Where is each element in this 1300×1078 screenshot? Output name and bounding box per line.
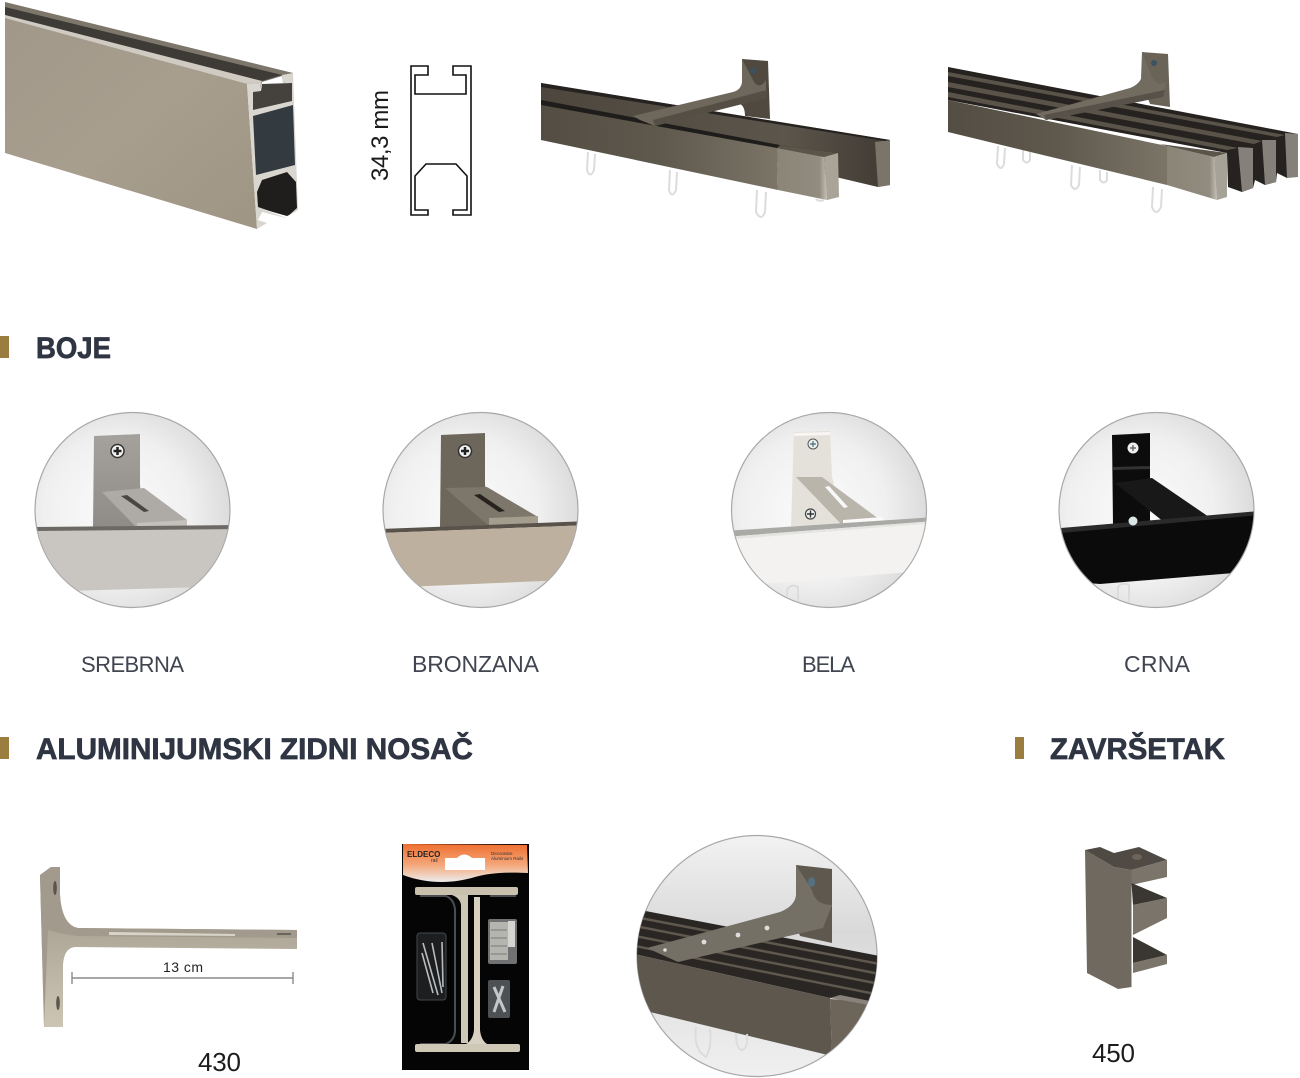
product: retail blister package: Aluminium Rails [491, 856, 524, 861]
colour swatch: bela [725, 412, 935, 610]
heading: BOJE: BOJE [36, 332, 111, 365]
product: end cap 450 [1085, 847, 1167, 989]
label: SREBRNA: SREBRNA [81, 652, 184, 677]
colour swatch: crna [1050, 412, 1270, 608]
product: retail blister package: Decorative [491, 851, 513, 856]
product: wall bracket 430 [40, 867, 297, 1027]
product: double rail with bracket [541, 59, 890, 217]
product: retail blister package: ELDECO [407, 850, 440, 859]
code: 450: 450 [1092, 1038, 1135, 1068]
dimension label: 34,3 mm: 34,3 mm [367, 90, 394, 181]
colour swatch: bronzana [380, 412, 590, 608]
product: rail profile photo [5, 2, 298, 229]
dimension text: 13 cm: 13 cm [163, 959, 203, 975]
detail circle: bracket on rail [630, 836, 885, 1076]
section marker: završetak [1015, 737, 1024, 759]
product: retail blister package [402, 844, 529, 1070]
profile cross-section drawing [411, 66, 471, 215]
section marker: nosač [0, 737, 9, 759]
heading: ZAVRŠETAK: ZAVRŠETAK [1050, 732, 1225, 766]
label: CRNA: CRNA [1124, 651, 1191, 677]
product: retail blister package: rail [431, 858, 438, 864]
code: 430: 430 [198, 1047, 241, 1077]
heading: ALUMINIJUMSKI ZIDNI NOSAČ: ALUMINIJUMSKI ZIDNI NOSAČ [36, 732, 473, 766]
rail fins [948, 67, 1298, 192]
product: quad rail with bracket [948, 52, 1298, 212]
label: BRONZANA: BRONZANA [412, 651, 540, 677]
dimension line [72, 972, 293, 984]
colour swatch: srebrna [30, 412, 240, 608]
section marker: boje [0, 336, 9, 358]
label: BELA: BELA [802, 652, 855, 677]
